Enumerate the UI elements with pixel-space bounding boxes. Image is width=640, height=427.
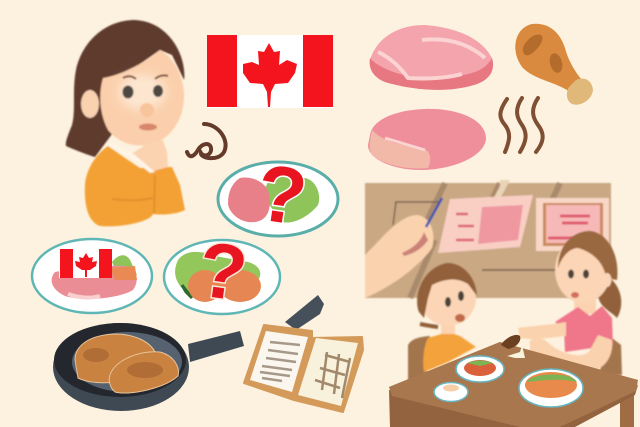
eyebrows <box>123 75 168 79</box>
raw meat bottom <box>368 109 486 170</box>
woman thinking <box>66 20 185 226</box>
steam <box>500 98 543 152</box>
mouth <box>139 124 157 130</box>
mother <box>518 231 622 375</box>
legs <box>393 395 411 427</box>
hair <box>66 20 184 157</box>
maple leaf <box>243 43 297 107</box>
child <box>408 263 477 380</box>
question mark: ? <box>251 147 312 242</box>
shirt <box>555 306 613 352</box>
photo: reading the meat label <box>365 183 611 298</box>
pink label left <box>438 195 533 253</box>
chicken drumstick <box>515 24 593 105</box>
collar and hand <box>110 140 168 172</box>
Canadian flag <box>207 35 333 108</box>
cutlets <box>75 334 155 383</box>
question mark: ? <box>193 224 252 318</box>
plate with question mark top <box>218 147 338 242</box>
small flag <box>59 249 112 278</box>
table <box>389 342 638 427</box>
chair <box>598 338 622 375</box>
pink label right <box>536 198 609 251</box>
ponytail <box>598 275 621 318</box>
head <box>555 237 611 303</box>
plate with flag <box>32 239 152 313</box>
raw meat top <box>370 25 493 90</box>
hair top <box>558 231 617 280</box>
bone <box>567 78 593 105</box>
recipe book <box>244 325 363 412</box>
face <box>100 50 184 145</box>
chicken bone <box>501 335 520 349</box>
small plate <box>456 356 504 382</box>
eyes <box>122 86 134 98</box>
sweater <box>85 146 185 226</box>
ear <box>81 90 99 118</box>
arms <box>518 322 566 339</box>
shirt <box>423 332 476 372</box>
large plate <box>519 369 583 407</box>
plate with cutlets <box>164 224 280 318</box>
head <box>420 270 476 326</box>
neck <box>574 290 596 314</box>
squiggle <box>187 124 226 158</box>
food on table <box>434 335 583 407</box>
frying pan <box>53 295 324 411</box>
nose <box>140 103 154 117</box>
neck <box>441 318 455 334</box>
chair <box>408 336 430 380</box>
hand <box>365 215 433 298</box>
saucer <box>434 382 468 402</box>
handle <box>188 331 244 362</box>
